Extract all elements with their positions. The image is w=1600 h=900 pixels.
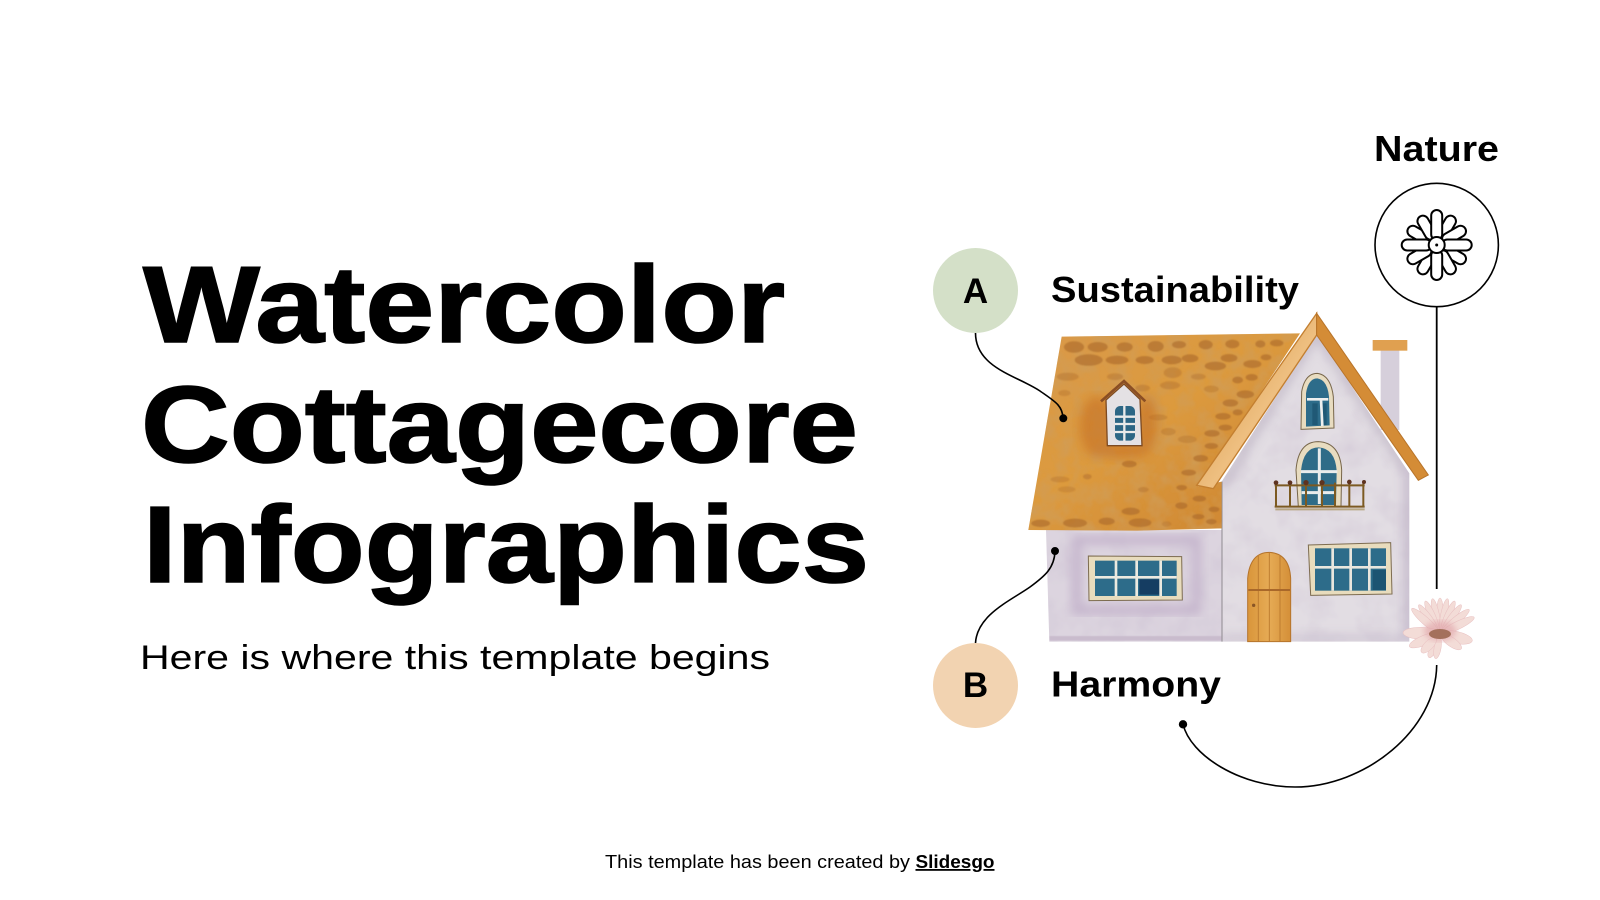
label: Sustainability: Sustainability bbox=[1051, 269, 1299, 310]
circle B bbox=[933, 643, 1018, 728]
circle A bbox=[933, 248, 1018, 333]
subtitle: Here is where this template begins bbox=[140, 639, 770, 677]
circle: Nature with flower icon bbox=[1375, 183, 1498, 307]
balcony railing bbox=[1274, 480, 1366, 509]
label: Harmony: Harmony bbox=[1051, 664, 1221, 704]
circle A: A bbox=[963, 272, 988, 311]
chimney bbox=[1373, 340, 1407, 430]
roof stain bbox=[1080, 397, 1157, 458]
gable wall bbox=[1222, 333, 1409, 642]
right window bbox=[1308, 543, 1392, 595]
balcony window bbox=[1296, 442, 1342, 507]
footer credit: This template has been created by bbox=[605, 852, 910, 872]
right trim bbox=[1317, 313, 1428, 480]
icon: watercolor house bbox=[1028, 313, 1428, 642]
lower wall bbox=[1046, 530, 1222, 642]
dormer window bbox=[1101, 381, 1145, 446]
icon: pink flower bbox=[1403, 598, 1476, 659]
title: Infographics bbox=[143, 484, 869, 606]
slide bbox=[142, 136, 1500, 872]
left window bbox=[1088, 556, 1182, 601]
shingles bbox=[1031, 340, 1283, 527]
left trim bbox=[1197, 313, 1317, 489]
icon: flower bbox=[1402, 210, 1472, 280]
footer credit: Slidesgo bbox=[916, 852, 995, 872]
label: Nature: Nature bbox=[1374, 128, 1499, 169]
title: Cottagecore bbox=[141, 364, 858, 486]
connector: Nature bottom curve bbox=[1180, 665, 1437, 787]
attic window bbox=[1301, 373, 1334, 429]
connector B bbox=[976, 548, 1058, 643]
title: Watercolor bbox=[143, 244, 785, 366]
title bbox=[141, 244, 869, 606]
circle B: B bbox=[963, 666, 988, 705]
door bbox=[1248, 552, 1291, 642]
connector: Nature vertical line bbox=[1436, 307, 1438, 589]
roof bbox=[1028, 333, 1300, 531]
connector A bbox=[976, 333, 1067, 421]
